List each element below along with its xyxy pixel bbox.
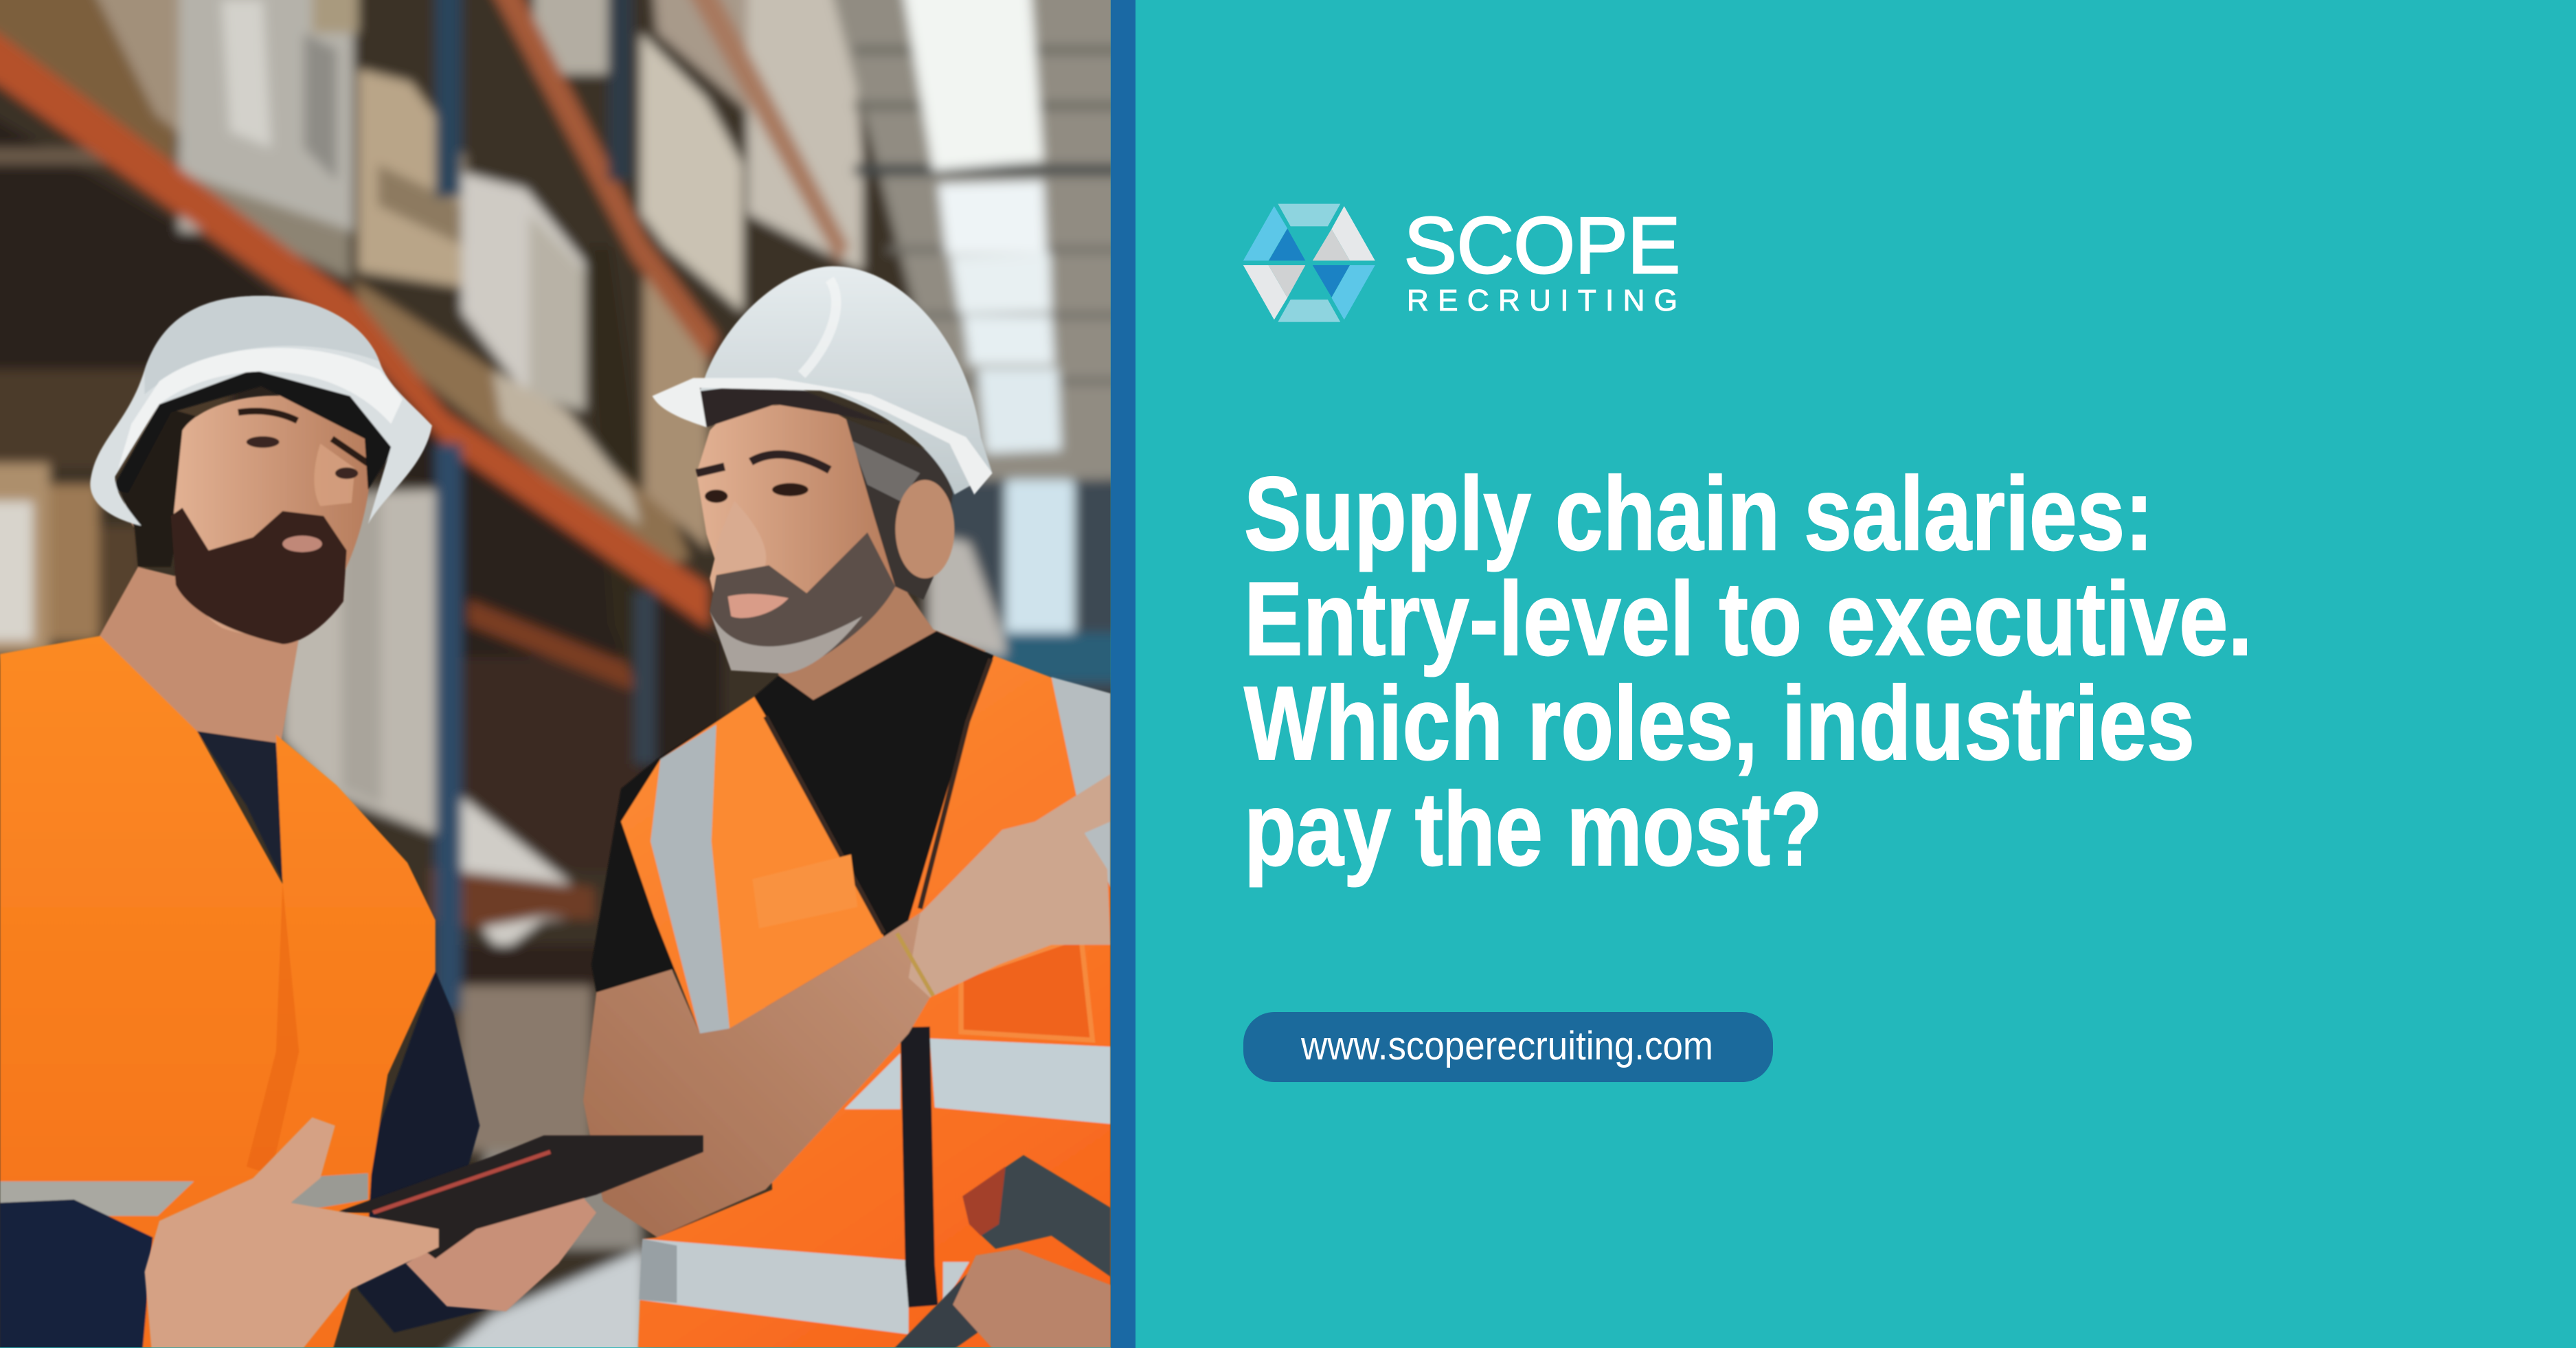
vest fold shading bbox=[247, 884, 299, 1175]
skylights bbox=[894, 0, 1043, 171]
navy jacket sleeve bbox=[0, 1200, 152, 1348]
upper pallets and boxes bbox=[0, 0, 181, 164]
reflective shoulder strip bbox=[651, 725, 730, 1033]
pocket flap bbox=[752, 855, 857, 928]
vest neckline edge bbox=[765, 659, 991, 933]
logo tagline: RECRUITING bbox=[1407, 284, 1677, 317]
face bbox=[173, 396, 372, 634]
neck bbox=[772, 575, 986, 772]
head band bbox=[112, 370, 394, 493]
logo: Scope Recruiting bbox=[1243, 201, 1680, 322]
photo: two warehouse workers in hard hats and orange vests bbox=[0, 0, 1183, 1348]
id pocket bbox=[961, 936, 1092, 1040]
headline: pay the most? bbox=[1244, 771, 1822, 888]
back hair bbox=[846, 419, 953, 600]
hard hat bbox=[700, 266, 993, 495]
left cardboard boxes bbox=[0, 463, 49, 654]
ceiling bbox=[828, 0, 1111, 488]
hair fringe and band bbox=[700, 385, 889, 427]
worker 1 (left) bbox=[0, 295, 499, 1348]
dark bays bbox=[0, 82, 723, 789]
icon: hexagon logo mark bbox=[1243, 204, 1375, 322]
eyes and brows bbox=[705, 490, 727, 503]
mouth bbox=[727, 594, 789, 618]
mouth bbox=[282, 536, 322, 552]
right sleeve bbox=[337, 971, 499, 1333]
face bbox=[697, 405, 895, 671]
dark tee bbox=[197, 731, 286, 887]
wrapped pallets behind bbox=[282, 490, 445, 838]
eyes bbox=[247, 436, 280, 448]
vest bbox=[0, 636, 436, 1348]
reflective strip bbox=[0, 1182, 194, 1216]
blue divider bar bbox=[1111, 0, 1136, 1348]
vest centre panel bbox=[712, 697, 884, 1029]
hard hat bbox=[90, 295, 432, 526]
headline: Entry-level to executive. bbox=[1244, 561, 2252, 677]
nose bbox=[714, 501, 766, 572]
bracelet bbox=[897, 933, 933, 996]
lower shelf bar bbox=[431, 868, 595, 928]
black polo bbox=[591, 631, 994, 1052]
beard bbox=[710, 532, 895, 674]
reflective belly strip bbox=[930, 1038, 1111, 1124]
ear bbox=[125, 460, 174, 536]
website pill button bbox=[1243, 1012, 1773, 1082]
tablet and hands bbox=[144, 1117, 703, 1348]
nose shade bbox=[314, 444, 355, 506]
white plastic bbox=[453, 790, 595, 953]
hand bbox=[909, 774, 1111, 998]
reflective bottom strip bbox=[639, 1239, 909, 1334]
ear bbox=[895, 480, 955, 578]
end wall and window bbox=[951, 475, 1111, 695]
hair bbox=[118, 407, 205, 567]
warehouse background bbox=[0, 0, 1183, 1348]
barcode scanner and hand bbox=[887, 1155, 1111, 1348]
headline: Which roles, industries bbox=[1244, 665, 2195, 782]
zipper bbox=[915, 1027, 923, 1306]
beard bbox=[171, 508, 347, 644]
left hand bbox=[144, 1117, 439, 1348]
hand under tablet bbox=[406, 1187, 596, 1311]
arm bbox=[583, 909, 930, 1237]
tablet bbox=[335, 1136, 703, 1259]
orange shelf beams bbox=[0, 0, 708, 628]
vest right bbox=[909, 655, 1111, 1348]
vest left bbox=[621, 697, 909, 1348]
website pill button: www.scoperecruiting.com bbox=[1300, 1024, 1713, 1068]
headline bbox=[1244, 456, 2252, 888]
blue uprights bbox=[436, 0, 462, 197]
headline: Supply chain salaries: bbox=[1244, 456, 2154, 572]
logo wordmark: SCOPE bbox=[1404, 201, 1680, 290]
wood pallet band bbox=[353, 280, 690, 567]
neck bbox=[99, 566, 300, 752]
lower boxes bbox=[460, 986, 591, 1150]
worker 2 (right) bbox=[583, 266, 1111, 1348]
